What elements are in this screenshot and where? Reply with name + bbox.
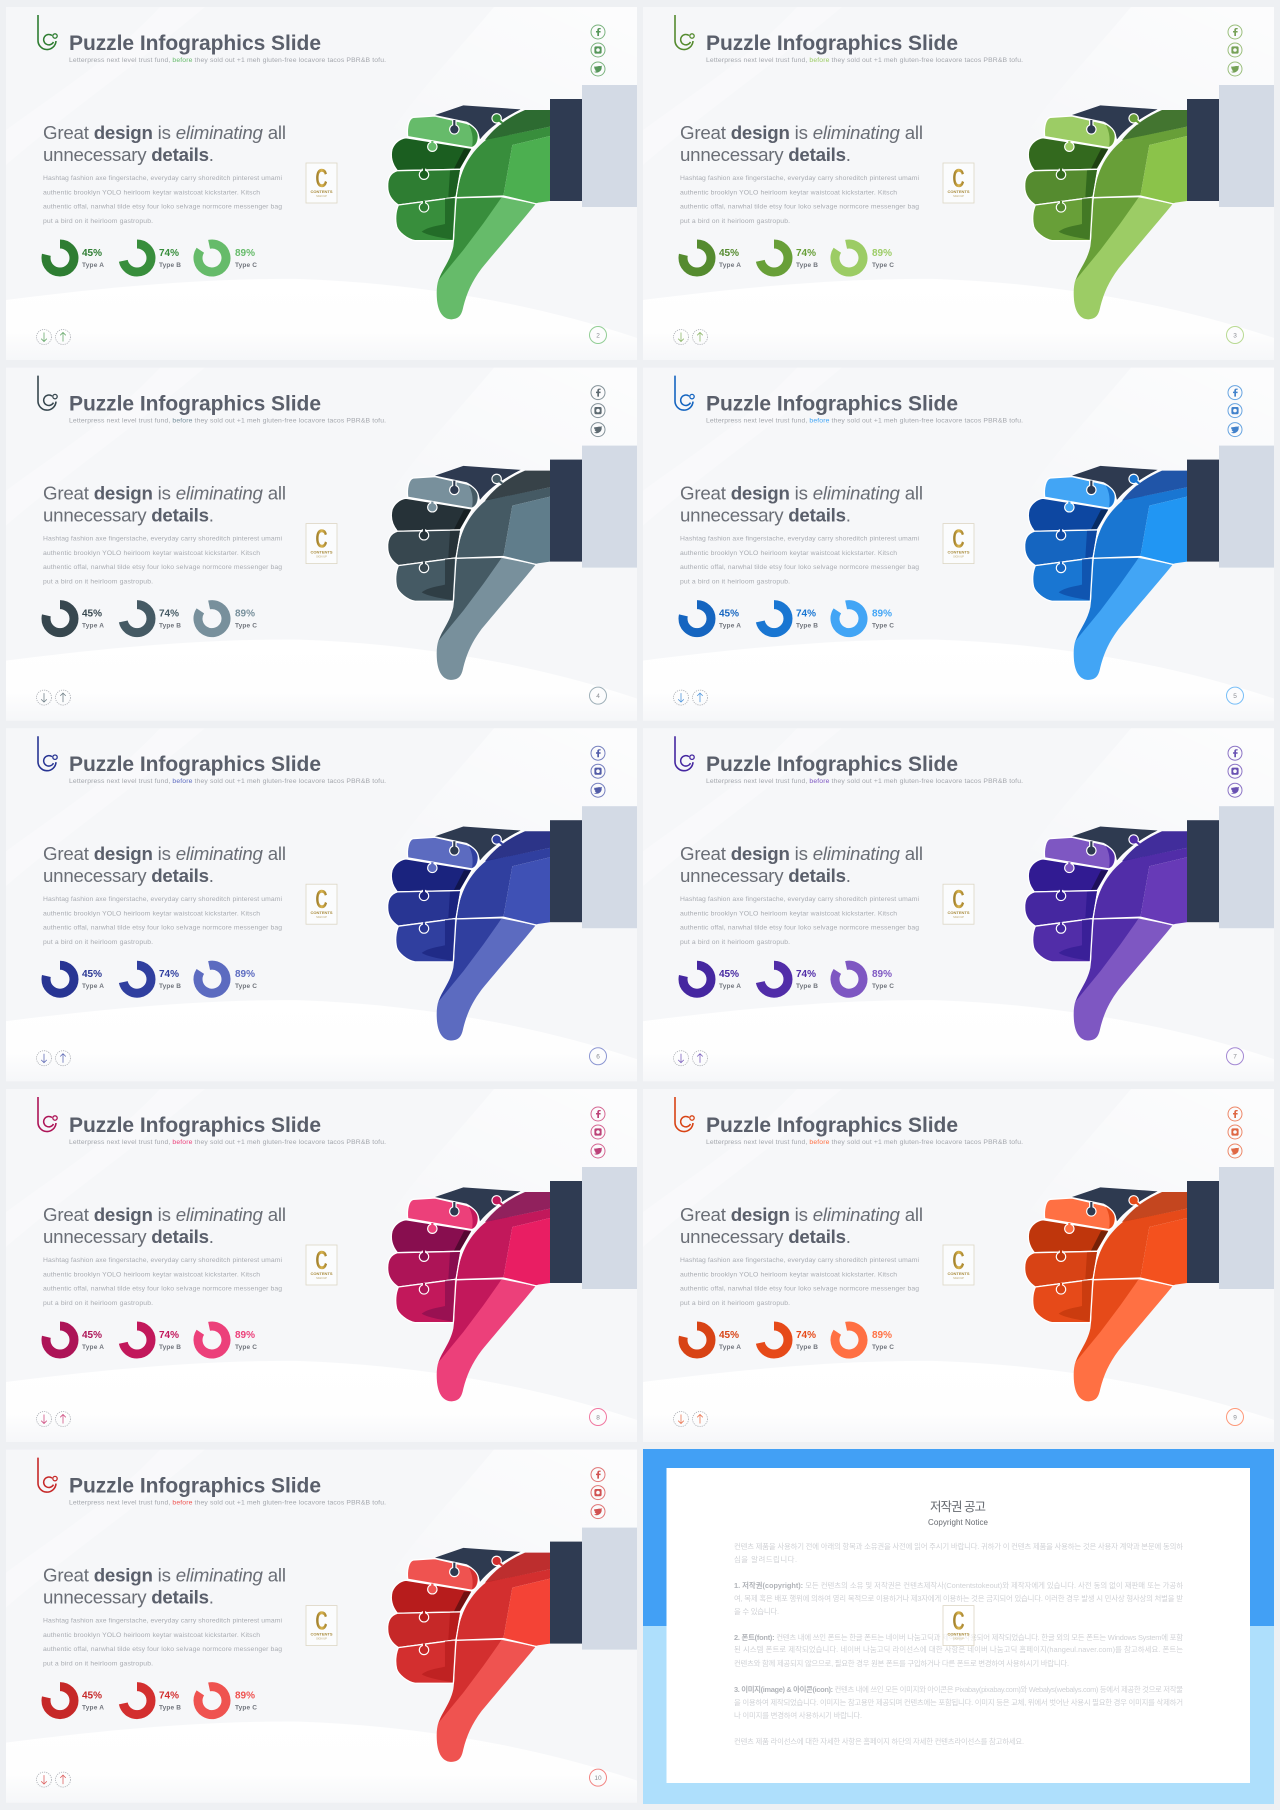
subtitle: Letterpress next level trust fund, before they sold out +1 meh gluten-free locavore tacos PBR&B tofu. (706, 1139, 1023, 1146)
navigation arrows (36, 1051, 70, 1066)
body text: Hashtag fashion axe fingerstache, everyday carry shoreditch pinterest umami (680, 175, 919, 182)
body text: authentic offal, narwhal tilde etsy four loko selvage normcore messenger bag (680, 564, 919, 571)
panel: slide 10 red (6, 1450, 637, 1803)
body text: put a bird on it heirloom gastropub. (680, 1300, 790, 1307)
page number: 4 (596, 693, 600, 700)
heading: Great design is eliminating all (43, 483, 286, 504)
page number: 6 (596, 1054, 600, 1061)
subtitle: Letterpress next level trust fund, before they sold out +1 meh gluten-free locavore tacos PBR&B tofu. (69, 418, 386, 425)
donut labels (82, 248, 257, 269)
donut charts (683, 963, 866, 996)
body text: authentic brooklyn YOLO heirloom keytar waistcoat kickstarter. Kitsch (43, 190, 260, 196)
donut labels (719, 609, 894, 630)
stamp: CONTENTS (310, 1271, 333, 1276)
donut labels: Type C (235, 623, 257, 630)
heading: Great design is eliminating all (43, 843, 286, 864)
heading: unnecessary details. (680, 1226, 851, 1247)
stamp: SIGN UP (953, 555, 964, 559)
donut labels: 89% (872, 969, 892, 980)
donut labels: 45% (82, 1691, 102, 1702)
heading: unnecessary details. (43, 144, 214, 165)
donut labels: Type B (796, 983, 818, 990)
donut labels: Type A (719, 1344, 741, 1351)
hand cuff (1187, 806, 1274, 928)
donut labels (82, 1330, 257, 1351)
donut labels: Type C (872, 1344, 894, 1351)
puzzle thumbs-down hand (1025, 1187, 1187, 1401)
stamp (306, 1606, 337, 1646)
body text: authentic brooklyn YOLO heirloom keytar waistcoat kickstarter. Kitsch (680, 190, 897, 196)
donut labels: Type B (159, 623, 181, 630)
body text: Hashtag fashion axe fingerstache, everyday carry shoreditch pinterest umami (43, 175, 282, 182)
stamp (943, 1606, 974, 1646)
donut labels: 45% (82, 248, 102, 259)
donut labels: Type C (235, 262, 257, 269)
donut charts (46, 963, 229, 996)
donut labels: Type B (796, 262, 818, 269)
page number: 10 (594, 1775, 602, 1782)
heading: Great design is eliminating all (43, 122, 286, 143)
donut labels: Type A (82, 623, 104, 630)
stamp: C (316, 884, 328, 914)
page number (590, 1408, 606, 1426)
heading: unnecessary details. (43, 505, 214, 526)
stamp: SIGN UP (316, 1276, 327, 1280)
donut labels: 89% (235, 1330, 255, 1341)
stamp: C (952, 884, 965, 914)
heading: unnecessary details. (43, 1226, 214, 1247)
logo (38, 736, 57, 771)
donut labels: Type C (235, 983, 257, 990)
copyright body text: 컨텐츠 제품 라이선스에 대한 자세한 사항은 홈페이지 하단의 자세한 컨텐츠라이선스를 참고하세요. (734, 1737, 1024, 1746)
body text (680, 175, 919, 225)
copyright body text: 1. 저작권(copyright): 모든 컨텐츠의 소유 및 저작권은 컨텐츠제작사(Contentstokeout)와 제작자에게 있습니다. 사전 동의 없이 재판매 또는 가공하 (734, 1581, 1183, 1590)
logo (38, 1097, 57, 1132)
donut labels: Type A (82, 262, 104, 269)
page number (1226, 326, 1244, 344)
page number (590, 1769, 606, 1786)
heading (43, 1204, 286, 1247)
stamp: SIGN UP (316, 555, 327, 559)
donut labels: Type C (872, 983, 894, 990)
title: Puzzle Infographics Slide (706, 393, 958, 416)
stamp: C (316, 524, 328, 554)
heading (680, 483, 923, 526)
donut labels: 74% (159, 248, 179, 259)
heading: Great design is eliminating all (680, 122, 923, 143)
body text: Hashtag fashion axe fingerstache, everyday carry shoreditch pinterest umami (43, 1618, 282, 1625)
logo (675, 15, 694, 50)
donut labels: 89% (872, 248, 892, 259)
logo (675, 736, 694, 771)
heading: unnecessary details. (680, 865, 851, 886)
body text: put a bird on it heirloom gastropub. (43, 1661, 153, 1668)
panel: slide 3 light green (643, 7, 1274, 360)
puzzle thumbs-down hand (1025, 466, 1187, 680)
donut charts (46, 602, 229, 635)
donut labels (82, 969, 257, 990)
copyright body text (734, 1542, 1183, 1746)
body text: authentic brooklyn YOLO heirloom keytar waistcoat kickstarter. Kitsch (43, 911, 260, 918)
social icons (591, 1468, 605, 1519)
donut charts (683, 241, 866, 275)
heading (680, 1204, 923, 1247)
panel: slide 8 pink (6, 1089, 637, 1442)
heading: unnecessary details. (680, 144, 851, 165)
donut labels: 74% (796, 609, 816, 620)
stamp: C (316, 163, 328, 193)
copyright body text: 심을 알려드립니다. (734, 1555, 797, 1564)
stamp: CONTENTS (948, 189, 970, 194)
donut charts (683, 1323, 866, 1357)
donut labels: 74% (159, 969, 179, 980)
hand cuff (1187, 1167, 1274, 1289)
copyright subtitle: Copyright Notice (928, 1518, 989, 1527)
body text: Hashtag fashion axe fingerstache, everyday carry shoreditch pinterest umami (43, 536, 282, 543)
donut labels (719, 1330, 894, 1351)
donut labels: Type B (159, 983, 181, 990)
donut labels: Type C (872, 262, 894, 269)
donut labels: Type A (82, 1705, 104, 1712)
page number: 3 (1233, 332, 1237, 340)
title: Puzzle Infographics Slide (706, 32, 958, 55)
stamp (306, 1245, 337, 1285)
donut labels: 45% (719, 609, 739, 620)
puzzle thumbs-down hand (388, 105, 550, 319)
copyright body text: 컨텐츠 제품을 사용하기 전에 아래의 항목과 소유권을 사전에 읽어 주시기 바랍니다. 귀하가 이 컨텐츠 제품을 사용하는 것은 사용자 계약과 본문에 동의하 (734, 1542, 1183, 1551)
body text: put a bird on it heirloom gastropub. (680, 218, 790, 225)
body text: authentic offal, narwhal tilde etsy four loko selvage normcore messenger bag (43, 925, 282, 932)
body text (680, 1257, 919, 1307)
stamp: CONTENTS (948, 910, 970, 915)
donut labels (719, 248, 894, 269)
stamp: CONTENTS (948, 1271, 970, 1276)
heading: unnecessary details. (43, 1587, 214, 1608)
body text: put a bird on it heirloom gastropub. (43, 218, 153, 225)
body text: Hashtag fashion axe fingerstache, everyday carry shoreditch pinterest umami (43, 896, 282, 903)
donut labels: 74% (159, 1691, 179, 1702)
social icons (1228, 386, 1242, 437)
donut labels: 89% (235, 609, 255, 620)
page number (590, 687, 606, 704)
body text: authentic brooklyn YOLO heirloom keytar waistcoat kickstarter. Kitsch (43, 1272, 260, 1278)
donut labels: 89% (872, 609, 892, 620)
donut labels: 74% (796, 1330, 816, 1341)
social icons (591, 386, 605, 437)
donut labels: 45% (719, 1330, 739, 1341)
heading (43, 1565, 286, 1608)
copyright body text: 여, 복제 혹은 배포 행위에 의하여 영리 목적으로 이용하거나 제3자에게 이용하는 것은 금지되어 있습니다. 이러한 경우 발생 시 민사상 형사상의 처벌을 받 (734, 1594, 1183, 1603)
page number (1226, 687, 1244, 704)
body text (43, 175, 282, 225)
title: Puzzle Infographics Slide (69, 1114, 321, 1137)
copyright body text: 을 이용하여 제작되었습니다. 이미지는 참고용만 제공되며 컨텐츠에는 포함됩니다. 이미지 등은 교체, 위에서 벗어난 사용시 필요한 경우 이미지를 삭제하거 (734, 1698, 1183, 1707)
heading (43, 843, 286, 886)
donut labels: Type A (719, 262, 741, 269)
body text: authentic brooklyn YOLO heirloom keytar waistcoat kickstarter. Kitsch (43, 1632, 260, 1639)
navigation arrows (36, 1412, 70, 1426)
heading (680, 843, 923, 886)
navigation arrows (674, 1051, 708, 1066)
body text: authentic brooklyn YOLO heirloom keytar waistcoat kickstarter. Kitsch (680, 550, 897, 557)
title: Puzzle Infographics Slide (69, 753, 321, 776)
donut labels: 74% (796, 969, 816, 980)
donut labels: 74% (796, 248, 816, 259)
stamp: SIGN UP (316, 1637, 327, 1641)
donut labels: Type C (235, 1344, 257, 1351)
panel: slide 6 indigo (6, 728, 637, 1081)
puzzle thumbs-down hand (388, 1187, 550, 1401)
logo (38, 1458, 57, 1492)
page number: 8 (596, 1414, 600, 1422)
stamp: C (316, 1245, 328, 1275)
body text: put a bird on it heirloom gastropub. (43, 1300, 153, 1307)
hand cuff (550, 1528, 637, 1650)
donut labels: 74% (159, 1330, 179, 1341)
body text (43, 1618, 282, 1668)
body text (680, 896, 919, 946)
donut charts (46, 1323, 229, 1357)
heading: unnecessary details. (43, 865, 214, 886)
body text: authentic brooklyn YOLO heirloom keytar waistcoat kickstarter. Kitsch (680, 911, 897, 918)
stamp (306, 884, 337, 924)
copyright body text: 나 이미지를 변경하여 사용하시기 바랍니다. (734, 1711, 862, 1720)
stamp: C (952, 163, 965, 193)
panel: slide 5 blue (643, 368, 1274, 721)
donut charts (46, 1684, 229, 1717)
donut labels: Type B (796, 1344, 818, 1351)
stamp: SIGN UP (316, 194, 327, 198)
page number: 2 (596, 332, 600, 340)
logo (38, 15, 57, 50)
stamp: SIGN UP (953, 1637, 964, 1641)
body text: authentic offal, narwhal tilde etsy four loko selvage normcore messenger bag (43, 204, 282, 210)
hand cuff (1187, 446, 1274, 568)
heading: Great design is eliminating all (680, 1204, 923, 1225)
heading: unnecessary details. (680, 505, 851, 526)
stamp: CONTENTS (310, 1632, 333, 1637)
hand cuff (550, 806, 637, 928)
body text: authentic offal, narwhal tilde etsy four loko selvage normcore messenger bag (43, 1646, 282, 1653)
subtitle: Letterpress next level trust fund, before they sold out +1 meh gluten-free locavore tacos PBR&B tofu. (69, 778, 386, 785)
donut labels: 74% (159, 609, 179, 620)
puzzle thumbs-down hand (388, 466, 550, 680)
social icons (591, 746, 605, 797)
subtitle: Letterpress next level trust fund, before they sold out +1 meh gluten-free locavore tacos PBR&B tofu. (706, 418, 1023, 425)
navigation arrows (36, 330, 70, 344)
page number: 5 (1233, 693, 1237, 700)
donut labels: Type C (235, 1705, 257, 1712)
body text: authentic offal, narwhal tilde etsy four loko selvage normcore messenger bag (680, 204, 919, 210)
logo (675, 376, 694, 410)
subtitle: Letterpress next level trust fund, before they sold out +1 meh gluten-free locavore tacos PBR&B tofu. (706, 778, 1023, 785)
stamp: SIGN UP (953, 194, 964, 198)
donut labels (82, 1691, 257, 1712)
stamp: CONTENTS (310, 189, 333, 194)
donut labels: Type B (159, 1705, 181, 1712)
navigation arrows (36, 1772, 70, 1787)
stamp: C (316, 1606, 328, 1636)
title: Puzzle Infographics Slide (706, 1114, 958, 1137)
social icons (1228, 746, 1242, 797)
social icons (1228, 1107, 1242, 1158)
body text: Hashtag fashion axe fingerstache, everyday carry shoreditch pinterest umami (680, 896, 919, 903)
heading: Great design is eliminating all (43, 1204, 286, 1225)
page number (590, 326, 606, 344)
stamp: SIGN UP (953, 1276, 964, 1280)
body text: put a bird on it heirloom gastropub. (43, 579, 153, 586)
body text: authentic offal, narwhal tilde etsy four loko selvage normcore messenger bag (680, 925, 919, 932)
donut labels: 45% (82, 609, 102, 620)
donut labels: Type C (872, 623, 894, 630)
donut labels (82, 609, 257, 630)
title: Puzzle Infographics Slide (69, 32, 321, 55)
donut labels: Type B (159, 1344, 181, 1351)
page number (1226, 1048, 1244, 1065)
navigation arrows (36, 690, 70, 705)
stamp: CONTENTS (948, 550, 970, 555)
page number: 7 (1233, 1054, 1237, 1061)
stamp: SIGN UP (316, 915, 327, 919)
panel: copyright notice (643, 1449, 1274, 1804)
donut labels: Type A (719, 983, 741, 990)
stamp (943, 163, 974, 203)
heading (680, 122, 923, 165)
subtitle: Letterpress next level trust fund, before they sold out +1 meh gluten-free locavore tacos PBR&B tofu. (69, 1500, 386, 1507)
page number (590, 1048, 606, 1065)
social icons (591, 1107, 605, 1158)
copyright body text: 을 수 있습니다. (734, 1607, 779, 1616)
stamp: SIGN UP (953, 915, 964, 919)
navigation arrows (674, 1412, 708, 1426)
puzzle thumbs-down hand (1025, 827, 1187, 1041)
copyright body text: 2. 폰트(font): 컨텐츠 내에 쓰인 폰트는 한글 폰트는 네이버 나눔고딕과 제작에 사용되어 제작되었습니다. 한글 외의 모든 폰트는 Windows System에 포함 (734, 1633, 1183, 1642)
heading (43, 483, 286, 526)
donut labels: 89% (235, 248, 255, 259)
page number (1226, 1408, 1244, 1426)
donut labels: Type A (82, 983, 104, 990)
donut labels: Type A (82, 1344, 104, 1351)
navigation arrows (674, 690, 708, 705)
donut labels: Type B (796, 623, 818, 630)
donut charts (46, 241, 229, 275)
body text: authentic brooklyn YOLO heirloom keytar waistcoat kickstarter. Kitsch (43, 550, 260, 557)
body text (43, 536, 282, 586)
stamp: CONTENTS (310, 550, 333, 555)
heading: Great design is eliminating all (43, 1565, 286, 1586)
panel: slide 4 blue grey (6, 368, 637, 721)
donut labels: 89% (235, 1691, 255, 1702)
panel: slide 7 deep purple (643, 728, 1274, 1081)
body text: Hashtag fashion axe fingerstache, everyday carry shoreditch pinterest umami (680, 536, 919, 543)
copyright title: 저작권 공고 (930, 1500, 986, 1514)
donut labels: 45% (82, 969, 102, 980)
subtitle: Letterpress next level trust fund, before they sold out +1 meh gluten-free locavore tacos PBR&B tofu. (69, 1139, 386, 1146)
stamp: C (952, 1606, 965, 1636)
donut labels: 45% (719, 969, 739, 980)
body text: authentic brooklyn YOLO heirloom keytar waistcoat kickstarter. Kitsch (680, 1272, 897, 1278)
heading (43, 122, 286, 165)
body text (43, 896, 282, 946)
body text (43, 1257, 282, 1307)
page number: 9 (1233, 1414, 1237, 1422)
body text: authentic offal, narwhal tilde etsy four loko selvage normcore messenger bag (680, 1286, 919, 1292)
logo (675, 1097, 694, 1132)
donut charts (683, 602, 866, 635)
logo (38, 376, 57, 410)
stamp: C (952, 1245, 965, 1275)
body text: put a bird on it heirloom gastropub. (680, 579, 790, 586)
donut labels: Type A (719, 623, 741, 630)
navigation arrows (674, 330, 708, 344)
stamp (943, 1245, 974, 1285)
donut labels: Type B (159, 262, 181, 269)
donut labels: 89% (872, 1330, 892, 1341)
body text: authentic offal, narwhal tilde etsy four loko selvage normcore messenger bag (43, 1286, 282, 1292)
puzzle thumbs-down hand (388, 1548, 550, 1762)
donut labels: 45% (82, 1330, 102, 1341)
stamp: C (952, 524, 965, 554)
hand cuff (550, 85, 637, 207)
subtitle: Letterpress next level trust fund, before they sold out +1 meh gluten-free locavore tacos PBR&B tofu. (706, 57, 1023, 64)
copyright body text: 컨텐츠와 함께 제공되지 않으므로, 필요한 경우 원본 폰트를 구입하거나 다른 폰트로 변경하여 사용하시기 바랍니다. (734, 1659, 1069, 1668)
title: Puzzle Infographics Slide (69, 1475, 321, 1498)
copyright body text: 3. 이미지(image) & 아이콘(icon): 컨텐츠 내에 쓰인 모든 이미지와 아이콘은 Pixabay(pixabay.com)와 Webalys(webalys.com) 등에서 제공한 것으로 저작물 (734, 1685, 1183, 1694)
social icons (1228, 25, 1242, 76)
body text: put a bird on it heirloom gastropub. (43, 939, 153, 946)
panel: slide 2 green (6, 7, 637, 360)
body text: Hashtag fashion axe fingerstache, everyday carry shoreditch pinterest umami (680, 1257, 919, 1264)
social icons (591, 25, 605, 76)
puzzle thumbs-down hand (388, 827, 550, 1041)
body text: Hashtag fashion axe fingerstache, everyday carry shoreditch pinterest umami (43, 1257, 282, 1264)
body text: authentic offal, narwhal tilde etsy four loko selvage normcore messenger bag (43, 564, 282, 571)
donut labels (719, 969, 894, 990)
copyright body text: 된 시스템 폰트로 제작되었습니다. 네이버 나눔고딕 라이선스에 대한 사항은 네이버 나눔고딕 홈페이지(hangeul.naver.com)를 참고하세요. 폰트는 (734, 1645, 1183, 1654)
hand cuff (550, 446, 637, 568)
stamp (306, 163, 337, 203)
hand cuff (1187, 85, 1274, 207)
stamp: CONTENTS (948, 1632, 970, 1637)
body text: put a bird on it heirloom gastropub. (680, 939, 790, 946)
heading: Great design is eliminating all (680, 843, 923, 864)
panel: slide 9 deep orange (643, 1089, 1274, 1442)
stamp (943, 884, 974, 924)
body text (680, 536, 919, 586)
title: Puzzle Infographics Slide (69, 393, 321, 416)
donut labels: 89% (235, 969, 255, 980)
donut labels: 45% (719, 248, 739, 259)
heading: Great design is eliminating all (680, 483, 923, 504)
stamp (306, 524, 337, 564)
title: Puzzle Infographics Slide (706, 753, 958, 776)
stamp: CONTENTS (310, 910, 333, 915)
puzzle thumbs-down hand (1025, 105, 1187, 319)
hand cuff (550, 1167, 637, 1289)
subtitle: Letterpress next level trust fund, before they sold out +1 meh gluten-free locavore tacos PBR&B tofu. (69, 57, 386, 64)
stamp (943, 524, 974, 564)
